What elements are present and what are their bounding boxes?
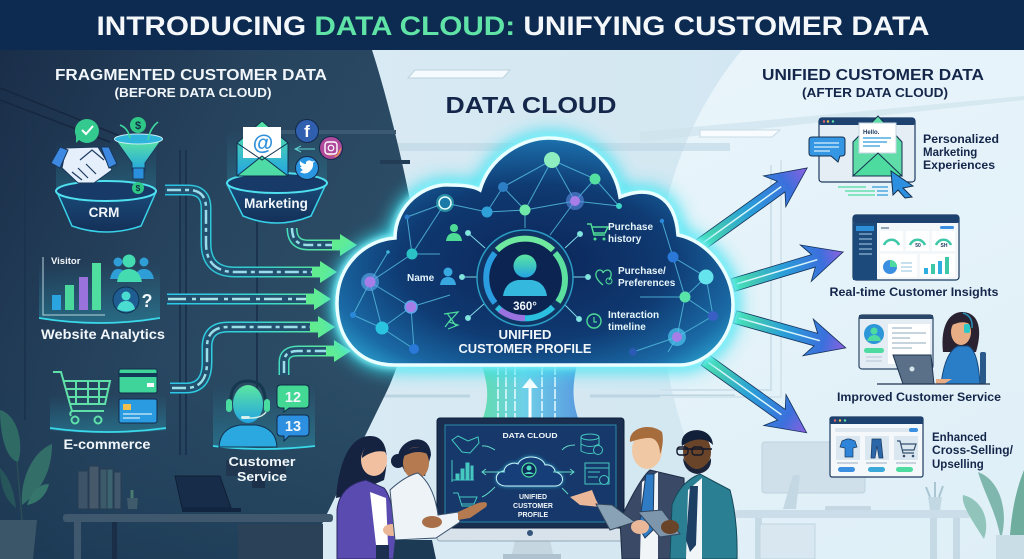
arrow: marketing to cloud <box>292 228 357 256</box>
cloud: unified customer profile <box>337 138 733 365</box>
benefit: personalized marketing <box>809 116 999 198</box>
person: man in teal suit <box>638 430 737 559</box>
title: INTRODUCING DATA CLOUD: UNIFYING CUSTOMER DATA <box>96 11 930 41</box>
field: interaction timeline: timeline <box>608 322 646 333</box>
field: purchase preferences: Preferences <box>618 278 676 289</box>
source: CRM <box>51 117 162 232</box>
icon: dollar coins <box>130 117 146 194</box>
arrow: CRM to cloud <box>165 190 337 283</box>
label: Website Analytics: Website Analytics <box>41 327 165 342</box>
left heading: (BEFORE DATA CLOUD) <box>114 86 272 100</box>
field: name <box>407 268 456 285</box>
right heading: (AFTER DATA CLOUD) <box>802 86 948 100</box>
label: unified customer profile <box>458 328 592 356</box>
icon: dashboard <box>853 215 959 280</box>
field: network icon <box>444 312 458 329</box>
label: enhanced cross-selling upselling: Upselling <box>932 459 984 471</box>
monitor caption: PROFILE <box>518 512 548 519</box>
spokes from profile <box>460 230 590 322</box>
arrow: to personalized marketing <box>689 153 818 260</box>
icon: dashboard: SH <box>941 243 948 249</box>
icon: CRM bucket <box>56 181 156 232</box>
label: CRM: CRM <box>89 205 119 220</box>
icon: browser with envelope <box>819 116 915 198</box>
arrow: e-commerce to cloud <box>170 316 335 388</box>
person: man in dark suit <box>570 427 686 559</box>
benefit: improved customer service <box>837 312 1001 404</box>
person: woman in purple <box>336 436 420 559</box>
icon: message bubble 12: 12 <box>285 390 301 406</box>
label: personalized marketing experiences <box>923 134 999 172</box>
field: purchase preferences <box>596 266 676 289</box>
arrow: to improved service <box>730 299 851 366</box>
label: personalized marketing experiences: Marketing <box>923 147 977 159</box>
person: woman in white shirt <box>390 439 487 559</box>
people group <box>336 427 737 559</box>
field: purchase history: history <box>608 234 642 245</box>
icon: dashboard: 50 <box>915 243 921 249</box>
icon: unknown visitor: ? <box>142 291 152 311</box>
centre heading: DATA CLOUD <box>446 92 616 118</box>
icon: dollar coins: $ <box>136 183 141 193</box>
label: enhanced cross-selling upselling: Enhanced <box>932 432 987 444</box>
benefit: real-time insights <box>830 215 999 299</box>
icon: profile silhouette <box>503 254 547 296</box>
label: E-commerce: E-commerce <box>64 437 151 452</box>
icon: instagram <box>320 136 342 160</box>
label: real-time customer insights: Real-time Customer Insights <box>830 285 999 299</box>
background: centre panel <box>300 50 742 559</box>
left heading: FRAGMENTED CUSTOMER DATA <box>55 67 327 84</box>
source: customer service <box>213 381 315 484</box>
field: name: Name <box>407 273 435 284</box>
central monitor <box>437 418 624 559</box>
icon: service agent <box>219 381 277 447</box>
monitor caption <box>513 494 553 519</box>
label: Customer Service: Service <box>237 469 287 484</box>
monitor caption: UNIFIED <box>519 494 547 501</box>
icon: marketing bucket <box>227 173 327 223</box>
source: website analytics <box>39 254 165 342</box>
icon: twitter <box>296 156 318 180</box>
icon: service agent at laptop <box>877 312 990 384</box>
arrow: website analytics to cloud <box>167 288 331 310</box>
monitor mini cloud <box>496 457 563 486</box>
data flow arrows from sources <box>165 190 357 388</box>
field: interaction timeline <box>587 310 659 333</box>
network lines <box>353 160 713 352</box>
icon: browser with envelope: Hello. <box>863 130 880 136</box>
uplink from monitor to cloud <box>480 360 578 418</box>
source: marketing <box>227 120 342 223</box>
icon: profile window <box>859 315 933 369</box>
icon: funnel <box>114 122 162 179</box>
icon: handshake <box>51 147 117 183</box>
right heading <box>762 67 984 100</box>
icon: check bubble <box>75 119 99 143</box>
icon: visitors group <box>110 254 154 282</box>
field: purchase history: Purchase <box>608 222 653 233</box>
icon: facebook: f <box>304 122 310 141</box>
profile ring 360 <box>477 230 573 326</box>
monitor icons <box>452 434 609 506</box>
icon: message bubble 13: 13 <box>285 419 301 435</box>
left heading <box>55 67 327 100</box>
label: personalized marketing experiences: Personalized <box>923 134 999 146</box>
icon: email envelope: @ <box>253 132 273 155</box>
label: enhanced cross-selling upselling: Cross-Selling/ <box>932 445 1014 457</box>
profile ring 360: 360° <box>513 301 537 313</box>
network nodes <box>350 152 718 356</box>
label: personalized marketing experiences: Experiences <box>923 160 995 172</box>
label: Customer Service <box>228 454 296 484</box>
background office right <box>380 70 1024 559</box>
title bar <box>0 0 1024 50</box>
benefit: cross-selling and upselling <box>830 417 1014 477</box>
arrow: to real-time insights <box>728 234 849 303</box>
source: e-commerce <box>50 369 166 452</box>
label: Customer Service: Customer <box>228 454 296 469</box>
arrow: to cross-selling <box>694 345 818 448</box>
result arrows <box>689 153 851 448</box>
arrow: customer service to cloud <box>284 340 351 375</box>
field: contact icon <box>446 224 462 241</box>
monitor title: DATA CLOUD <box>502 431 558 440</box>
background: left dark panel <box>0 50 412 559</box>
label: improved customer service: Improved Customer Service <box>837 390 1001 404</box>
field: interaction timeline: Interaction <box>608 310 659 321</box>
field: purchase preferences: Purchase/ <box>618 266 666 277</box>
monitor caption: CUSTOMER <box>513 503 553 510</box>
icon: shopping cart <box>53 372 110 424</box>
icon: shop window <box>830 417 923 477</box>
chart: visitor bars: Visitor <box>51 256 81 267</box>
icon: credit cards <box>119 369 157 423</box>
label: enhanced cross-selling upselling <box>932 432 1014 471</box>
label: Marketing: Marketing <box>244 196 308 211</box>
icon: chat bubble <box>809 137 845 162</box>
label: unified customer profile: CUSTOMER PROFILE <box>458 342 592 356</box>
right heading: UNIFIED CUSTOMER DATA <box>762 67 984 84</box>
label: unified customer profile: UNIFIED <box>498 328 552 342</box>
icon: dollar coins: $ <box>135 120 141 132</box>
field: purchase history <box>587 222 653 245</box>
